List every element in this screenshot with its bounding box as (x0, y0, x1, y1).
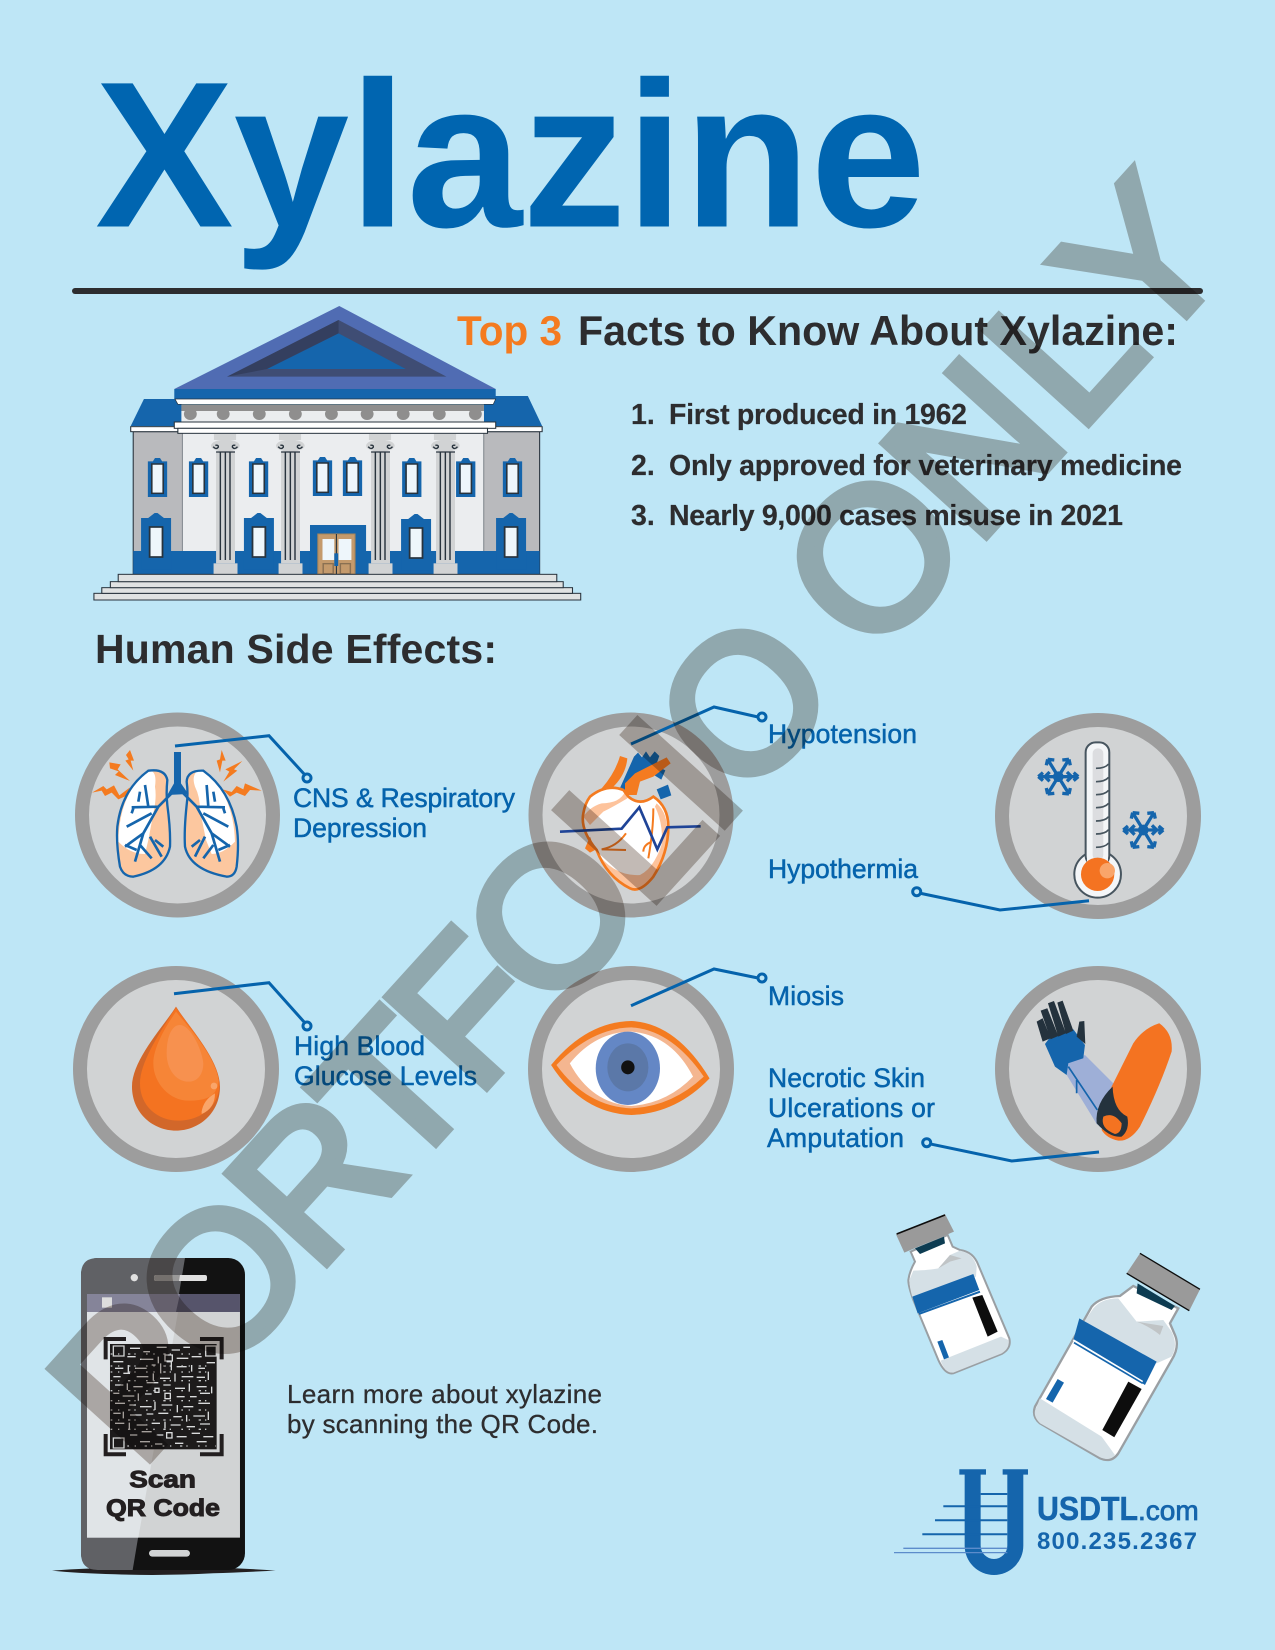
phone shadow (52, 1567, 276, 1575)
logo mark (894, 1469, 1028, 1575)
QR caption: QR Code (106, 1495, 220, 1522)
icon: heart (560, 751, 701, 889)
icon: lungs (92, 750, 262, 877)
facts list: 3. (631, 500, 655, 532)
panel: thermometer (768, 720, 1194, 912)
label: Hypotension (768, 719, 917, 749)
watermark: portfolio only: PORTFOLIO (9, 575, 875, 1498)
leader line (175, 736, 305, 775)
icon: courthouse building (94, 306, 581, 600)
panel: blood drop (80, 973, 477, 1165)
facts list: 1. (631, 399, 655, 431)
leader dot (758, 974, 766, 982)
logo text: USDTL.com (1037, 1490, 1199, 1527)
label (767, 1063, 935, 1153)
icon: circle badge (1002, 973, 1194, 1165)
panel: lungs (82, 720, 516, 910)
leader line (929, 1144, 1099, 1161)
label: Depression (293, 813, 427, 843)
leader line (174, 983, 305, 1023)
text: QR instructions: Learn more about xylazine (287, 1379, 602, 1409)
panel: heart (536, 707, 917, 910)
heading: human side effects: Human Side Effects: (95, 626, 497, 672)
leader dot (913, 888, 921, 896)
label: Miosis (768, 981, 844, 1011)
icon: vials (896, 1214, 1200, 1460)
QR caption: Scan (129, 1466, 196, 1493)
icon: circle badge (536, 720, 726, 910)
phone screen (87, 1294, 240, 1538)
label: CNS & Respiratory (293, 783, 516, 813)
heading: top 3 facts: Top 3 (457, 307, 562, 354)
small vial (896, 1214, 1010, 1373)
watermark: portfolio only: ONLY (739, 138, 1269, 690)
leader line (631, 969, 758, 1006)
panel: amputation (767, 973, 1194, 1165)
facts list (631, 399, 1182, 532)
icon: phone with QR code (52, 1258, 276, 1575)
phone home button (149, 1550, 190, 1557)
icon: circle badge (80, 973, 272, 1165)
facts list: Only approved for veterinary medicine (669, 450, 1182, 482)
heading: top 3 facts: Facts to Know About Xylazine: (578, 307, 1178, 354)
panel: eye (535, 969, 844, 1165)
text: QR instructions (287, 1379, 602, 1439)
logo: USDTL (894, 1469, 1199, 1575)
label: High Blood (294, 1031, 425, 1061)
title: Xylazine (95, 40, 926, 272)
label: Ulcerations or (768, 1093, 935, 1123)
icon: circle badge (535, 973, 727, 1165)
label: Hypothermia (768, 854, 918, 884)
icon: circle badge (1002, 720, 1194, 912)
phone speaker (131, 1274, 207, 1281)
leader dot (923, 1139, 931, 1147)
facts list: First produced in 1962 (669, 399, 967, 431)
leader line (631, 707, 758, 744)
logo phone: 800.235.2367 (1037, 1528, 1197, 1555)
title rule (72, 288, 1203, 294)
large vial (1034, 1253, 1200, 1460)
icon: arm (1037, 1001, 1172, 1141)
label: Glucose Levels (294, 1061, 477, 1091)
leader dot (303, 774, 311, 782)
QR code (106, 1339, 222, 1454)
facts list: Nearly 9,000 cases misuse in 2021 (669, 500, 1123, 532)
leader dot (758, 713, 766, 721)
facts list: 2. (631, 450, 655, 482)
phone body (81, 1258, 245, 1570)
leader dot (303, 1022, 311, 1030)
icon: circle badge (82, 720, 273, 910)
leader line (919, 893, 1089, 910)
icon: drop (132, 1007, 220, 1131)
icon: thermometer (1038, 742, 1163, 898)
label (293, 783, 516, 843)
label: Amputation (767, 1123, 904, 1153)
icon: eye (551, 1021, 710, 1115)
label (294, 1031, 477, 1091)
text: QR instructions: by scanning the QR Code. (287, 1409, 598, 1439)
QR caption (106, 1466, 220, 1522)
label: Necrotic Skin (768, 1063, 925, 1093)
